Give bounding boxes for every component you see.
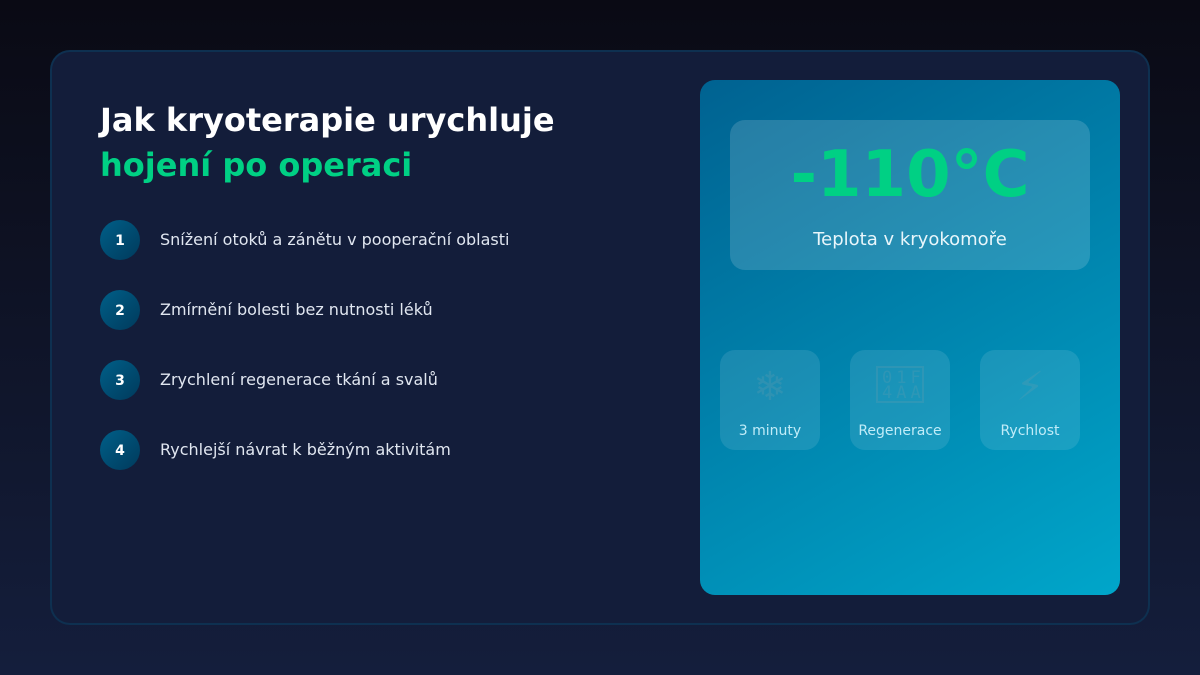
list item 3 [100, 360, 438, 400]
temperature caption: Teplota v kryokomoře [813, 229, 1007, 250]
subtitle: hojení po operaci [100, 146, 412, 184]
tile: regeneration [850, 350, 950, 450]
list item 3: Zrychlení regenerace tkání a svalů [160, 370, 438, 389]
list item 4 [100, 430, 451, 470]
list item 1 [100, 220, 509, 260]
tile label: Regenerace [858, 423, 942, 439]
list item 2: Zmírnění bolesti bez nutnosti léků [160, 300, 433, 319]
icon: missing-glyph box: 01F 4AA [882, 368, 925, 403]
tile: speed [980, 350, 1080, 450]
tile label: Rychlost [1000, 423, 1060, 439]
list item 3: 3 [115, 373, 125, 389]
list item 4: 4 [115, 443, 125, 459]
tile label: 3 minuty [739, 423, 801, 439]
tile: 3 minutes [720, 350, 820, 450]
list item 4: Rychlejší návrat k běžným aktivitám [160, 440, 451, 459]
main card [50, 50, 1150, 625]
temperature card [730, 120, 1090, 270]
icon: lightning: ⚡ [1016, 364, 1044, 410]
list item 1: 1 [115, 233, 125, 249]
panel: cryo chamber [700, 80, 1120, 595]
list item 2 [100, 290, 433, 330]
icon: snowflake: ❄ [753, 364, 787, 410]
title: Jak kryoterapie urychluje [100, 101, 555, 139]
list item 1: Snížení otoků a zánětu v pooperační oblasti [160, 230, 509, 249]
temperature value: -110°C [790, 138, 1030, 212]
list item 2: 2 [115, 303, 125, 319]
